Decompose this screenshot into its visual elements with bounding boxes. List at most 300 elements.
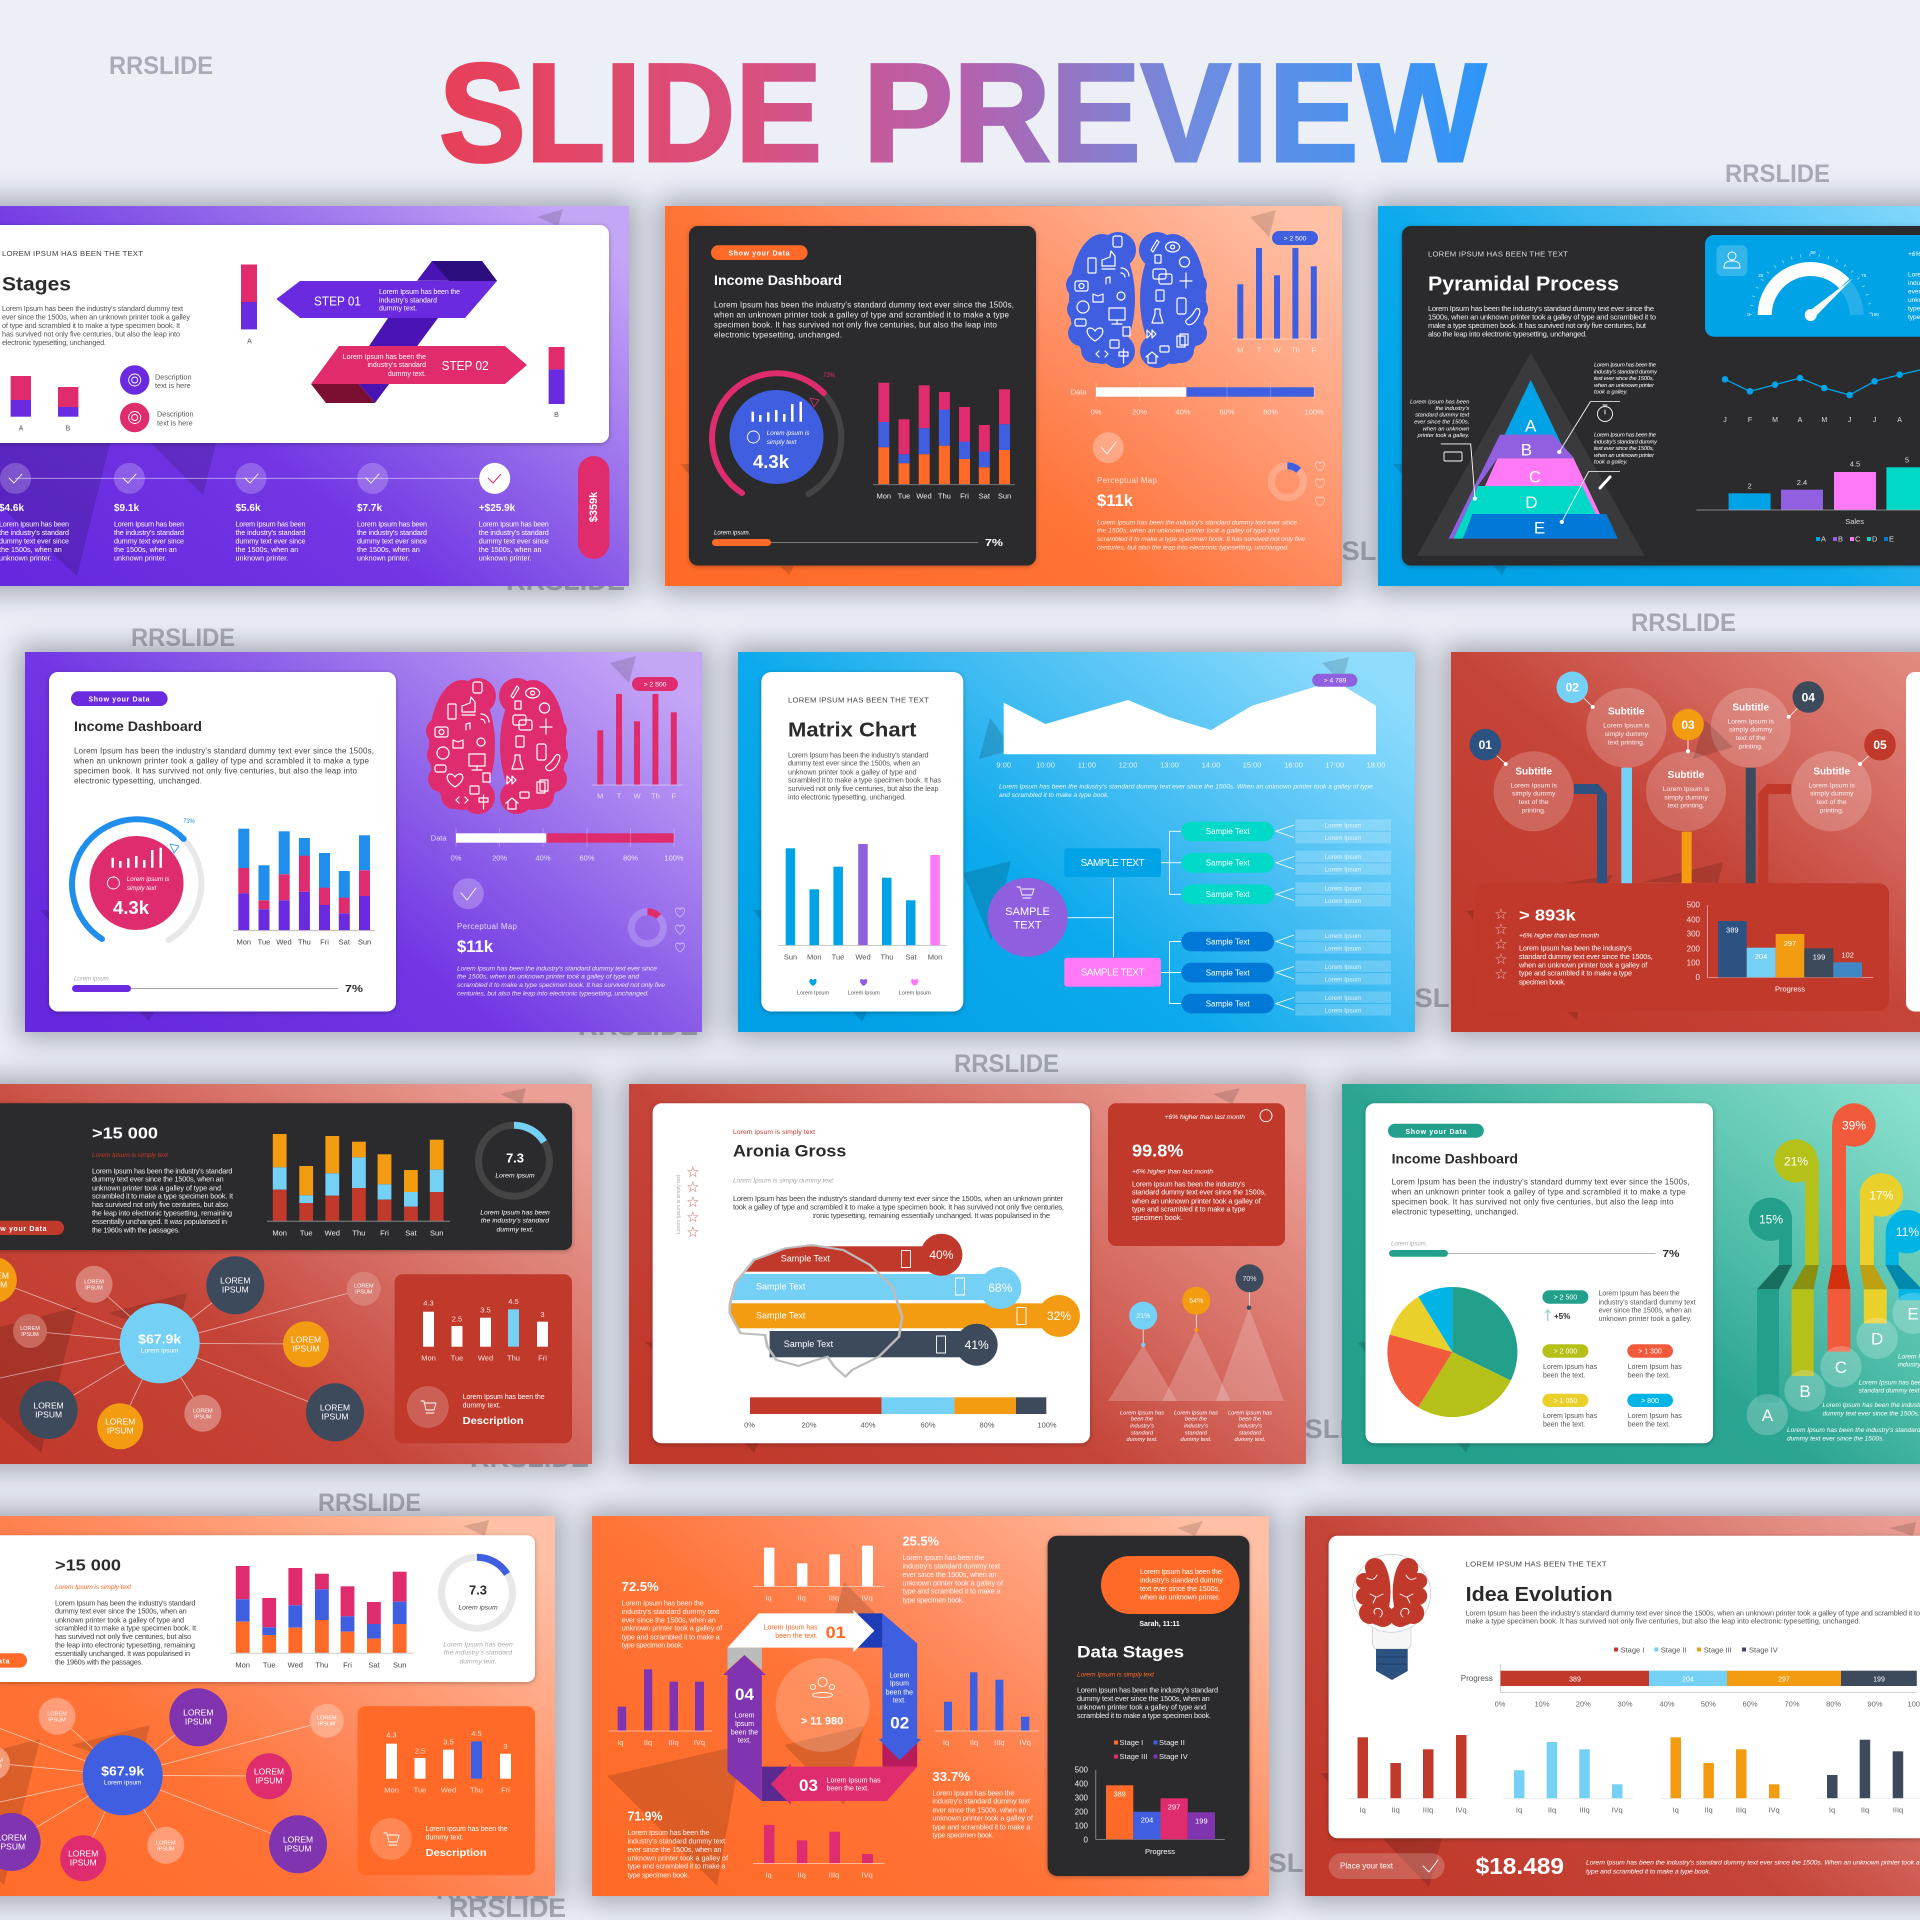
data progress bar: 0% (451, 854, 462, 863)
stat text: specimen book. (1519, 977, 1566, 986)
watermarks: RRSLIDE (1265, 1414, 1385, 1444)
circles with text: Lorem Ipsum is (1808, 782, 1856, 789)
callouts: when an unknown printer (1594, 383, 1655, 389)
panel: red stat: Lorem Ipsum has been the industry's (1132, 1179, 1245, 1188)
network diagram: LOREM (354, 1284, 374, 1290)
slide: 15 000 white (0, 1516, 555, 1896)
text blocks: percentages: 71.9% (628, 1810, 662, 1824)
stacked bar: progress: 199 (1873, 1676, 1885, 1684)
flowchart: Lorem Ipsum (1325, 976, 1361, 984)
circles with text: simply dummy (1664, 794, 1708, 801)
heading: Idea Evolution (1466, 1584, 1613, 1606)
stars: ☆ (1494, 920, 1508, 938)
stacked bar chart: Wed (276, 937, 292, 946)
text block: electronic typesetting, unchanged. (1392, 1208, 1519, 1217)
text block: perceptual map: centuries, but also the leap into electronic typesetting, unchanged. (1097, 544, 1289, 551)
bar chart: progress: 200 (1687, 944, 1701, 953)
circles with text: simply dummy (1810, 791, 1854, 798)
flowchart: SAMPLE (1005, 906, 1050, 918)
area chart: 9:00 (996, 761, 1011, 770)
donut (478, 1125, 550, 1233)
chart: percent ribbons: D (1871, 1330, 1883, 1348)
timeline values and text: the 1500s, when an (114, 545, 177, 554)
circles with text: text of the (1736, 735, 1766, 742)
chart: four quarter groups: IVq (1455, 1806, 1467, 1815)
chart: pyramid: C (1529, 468, 1541, 487)
flowchart: Sample Text (1206, 968, 1250, 978)
bar chart: sales: 5 (1905, 456, 1909, 465)
legend pills and text: unknown printer took a galley. (1599, 1316, 1692, 1323)
flowchart: Lorem Ipsum (1325, 995, 1361, 1002)
chart: peaks: 70% (1242, 1276, 1257, 1283)
text block (2, 304, 190, 347)
chart: percent ribbons: 17% (1869, 1188, 1894, 1202)
chart: small bars A B: B (66, 426, 71, 433)
chart: percent ribbons: 11% (1896, 1225, 1919, 1239)
captions: dummy text ever since the 1500s. (1787, 1435, 1884, 1442)
callouts: text ever since the 1500s, (1594, 446, 1654, 452)
ribbon: steps: STEP 02 (442, 359, 489, 373)
data progress bar (1071, 382, 1324, 417)
chart: top bars: IIq (797, 1593, 806, 1602)
panel: red stat: when an unknown printer took a galley of (1131, 1196, 1261, 1205)
speech bubble: industry's standard dummy (1140, 1575, 1223, 1584)
callout: total pill: $359k (588, 491, 600, 522)
slide: Income Dashboard purple (25, 652, 702, 1032)
timeline values and text: the industry's standard (0, 528, 69, 537)
heading (1077, 1643, 1184, 1678)
heading (55, 1557, 132, 1591)
title: PREVIEW (863, 34, 1486, 191)
panel: red stat: specimen book. (1132, 1213, 1182, 1222)
text block: unknown printer took a galley of type and (788, 767, 917, 776)
text blocks: percentages: type specimen book. (622, 1641, 683, 1650)
text block (92, 1166, 233, 1234)
ribbon: steps: Lorem Ipsum has been the (379, 289, 460, 296)
ribbons (1574, 768, 1791, 884)
stars: ☆ (686, 1193, 700, 1211)
stacked bar chart: Fri (380, 1228, 389, 1237)
panel: gauge: type (1908, 314, 1920, 321)
text block: Lorem Ipsum has been the industry's standard (92, 1166, 232, 1175)
stars: ☆ (1494, 965, 1508, 983)
slide: Aronia Gross (629, 1084, 1306, 1464)
chart: percent ribbons: 39% (1842, 1118, 1866, 1132)
numbered badges: 02 (1566, 681, 1579, 695)
gauge (712, 373, 841, 494)
stat text: Lorem Ipsum has been the industry's (1519, 944, 1632, 953)
text block: the 1960s with the passages. (92, 1225, 180, 1234)
stacked bar chart: Sat (339, 937, 351, 946)
data progress bar: 20% (492, 854, 507, 863)
donut: Lorem ipsum (495, 1172, 535, 1179)
network diagram: Lorem ipsum (141, 1347, 178, 1354)
text blocks: percentages: Lorem Ipsum has been the (932, 1788, 1014, 1797)
callouts: Lorem Ipsum has been the (1594, 433, 1657, 439)
watermarks: RRSLIDE (318, 1489, 421, 1517)
text block: dummy text ever since the 1500s, when an (92, 1175, 224, 1184)
network diagram: LOREM (84, 1279, 104, 1285)
chart: four quarter groups: IIIq (1736, 1806, 1746, 1815)
mini bar chart: W (1273, 346, 1281, 355)
network diagram: LOREM (105, 1417, 135, 1427)
circles with text: printing. (1820, 808, 1844, 815)
cycle diagram: text. (893, 1698, 906, 1705)
timeline values and text: unknown printer. (479, 553, 532, 562)
callout: total pill (578, 456, 609, 559)
legend: Stage I (1621, 1646, 1644, 1655)
text blocks: percentages: industry's standard dummy text (932, 1797, 1030, 1806)
area chart (996, 681, 1385, 770)
text block: essentially unchanged. It was popularised in (92, 1217, 227, 1226)
text block: perceptual map (457, 922, 665, 997)
area chart: 12:00 (1119, 761, 1137, 770)
text blocks: percentages: unknown printer took a galley of (622, 1624, 722, 1633)
chart: peaks: standard (1185, 1430, 1208, 1436)
timeline values and text: the 1500s, when an (0, 545, 62, 554)
timeline values and text: $7.7k (357, 503, 382, 514)
legend: Lorem Ipsum (899, 991, 931, 997)
stacked bar: progress: 389 (1569, 1676, 1581, 1684)
circles with text: Lorem Ipsum is (1510, 782, 1558, 789)
text blocks: percentages: type and scrambled it to make a (622, 1632, 720, 1641)
heading: Aronia Gross (733, 1142, 846, 1161)
stars: ☆ (686, 1208, 700, 1226)
timeline values and text: Lorem Ipsum has been (114, 520, 184, 528)
circles with text: Subtitle (1515, 766, 1552, 777)
chart: brain bars: 40% (929, 1248, 954, 1262)
stacked bar chart: Tue (263, 1660, 276, 1669)
gauge: 73% (823, 373, 836, 379)
circles with text: text printing. (1608, 739, 1645, 746)
panel: description: 3.5 (480, 1306, 491, 1315)
watermarks: RRSLIDE (1375, 983, 1495, 1013)
progress bar: 7% (345, 984, 363, 995)
data progress bar: 40% (1175, 408, 1191, 417)
stacked bar chart: Mon (272, 1228, 287, 1237)
bar chart: sales: Sales (1845, 517, 1864, 526)
legend pills and text: been the text. (1628, 1421, 1670, 1428)
icons (1444, 405, 1612, 488)
speech bubble: Lorem Ipsum has been the (1140, 1567, 1222, 1576)
flowchart: Lorem Ipsum (1325, 946, 1361, 952)
stacked bar: progress: 0% (1495, 1699, 1506, 1708)
callouts: Lorem Ipsum has been the (1594, 363, 1657, 369)
panel: description: 4.5 (508, 1297, 519, 1306)
gauge: simply text (767, 439, 797, 446)
stacked bar chart: Fri (960, 491, 969, 500)
panel: white card (0, 225, 609, 443)
text block: Lorem Ipsum has been the industry's standard (1077, 1686, 1218, 1695)
pill label: Show your Data (728, 250, 790, 258)
stacked bar: progress: 297 (1778, 1676, 1790, 1684)
legend pills and text: Lorem Ipsum has been the (1599, 1291, 1680, 1298)
stacked bar chart: Tue (300, 1228, 313, 1237)
mini bar chart: Th (651, 792, 660, 801)
icons and descriptions: Description (157, 410, 194, 419)
timeline values and text: dummy text ever since (236, 536, 306, 545)
text block (788, 750, 941, 802)
gauge: 73% (183, 819, 196, 825)
text blocks: percentages: type specimen book. (902, 1595, 964, 1604)
chart: left bars (609, 1669, 712, 1747)
data progress bar: 40% (535, 854, 551, 863)
callouts: ever since the 1500s, (1414, 419, 1469, 425)
text block: dummy text ever since the 1500s, when an (1077, 1694, 1210, 1703)
area chart: 14:00 (1202, 761, 1220, 770)
panel: description: 2.5 (452, 1314, 462, 1323)
circles with text: Subtitle (1668, 770, 1705, 781)
network diagram: IPSUM (256, 1776, 282, 1786)
text block: the leap into electronic typesetting, remaining (92, 1209, 232, 1218)
text block: 1500s, when an unknown printer took a galley of type and scrambled it to (1428, 312, 1656, 321)
bar chart: progress: 102 (1841, 951, 1854, 960)
network diagram: IPSUM (293, 1344, 319, 1354)
stacked bar: progress: 40% (1659, 1699, 1675, 1708)
text blocks: percentages: type and scrambled it to make a (902, 1587, 1000, 1596)
heading: Matrix Chart (788, 720, 917, 742)
data progress bar: Data (431, 833, 447, 842)
area chart: 16:00 (1284, 761, 1303, 770)
text block: Lorem Ipsum has been the industry's standard (788, 750, 928, 759)
panel: description: 4.3 (423, 1299, 434, 1308)
text block: perceptual map: Perceptual Map (1097, 476, 1158, 485)
circles with text (1494, 688, 1872, 831)
flowchart: Lorem Ipsum (1325, 933, 1361, 940)
stacked progress bar: 20% (801, 1421, 817, 1430)
heading: >15 000 (92, 1125, 158, 1142)
bar chart: progress: 297 (1784, 939, 1796, 948)
stacked progress bar: 60% (920, 1421, 936, 1430)
bar chart: sales: 2 (1748, 482, 1752, 491)
progress bar (72, 977, 363, 995)
chart: percent ribbons: A (1762, 1406, 1774, 1425)
cycle diagram: > 11 980 (801, 1715, 843, 1727)
circles with text: text of the (1817, 799, 1847, 806)
flowchart: Lorem Ipsum (1325, 822, 1361, 830)
panel: description: Fri (538, 1354, 547, 1363)
mini bar chart: F (1312, 346, 1317, 355)
italic caption (999, 783, 1373, 799)
stacked bar chart: Sun (998, 491, 1011, 500)
panel: gauge: type (1908, 305, 1920, 312)
panel: gauge: 100 (1871, 312, 1879, 317)
stacked bar: progress: 204 (1682, 1676, 1694, 1684)
bar A (241, 264, 257, 346)
stacked bar: progress (1461, 1664, 1920, 1708)
panel: dark card (689, 226, 1036, 566)
legend: Lorem Ipsum (797, 991, 829, 997)
pill label (711, 245, 808, 260)
line chart: J (1848, 417, 1851, 424)
cycle diagram: 03 (799, 1776, 818, 1795)
captions (1787, 1353, 1920, 1442)
progress bar (712, 531, 1003, 549)
cycle diagram: Lorem (735, 1712, 755, 1719)
donut and hearts (1271, 462, 1324, 506)
chart: pyramid (1417, 353, 1645, 556)
callout pill: > 2 500 (1284, 236, 1307, 242)
legend pills and text: Lorem Ipsum has (1628, 1364, 1682, 1371)
gauge: 4.3k (753, 452, 790, 472)
panel: dark card (1048, 1536, 1249, 1876)
stacked bar chart: Sat (405, 1228, 417, 1237)
heading: >15 000 (55, 1557, 121, 1574)
timeline values and text: the industry's standard (479, 528, 549, 537)
legend pills and text: ever since the 1500s, when an (1599, 1308, 1692, 1315)
circles with text: Subtitle (1813, 766, 1850, 777)
legend pills and text: been the text. (1543, 1372, 1585, 1379)
heading (1466, 1559, 1613, 1606)
ribbon: steps (276, 261, 527, 403)
stacked bar chart: Thu (938, 491, 951, 500)
callout pill (1312, 674, 1357, 687)
legend pills and text: Lorem Ipsum has (1543, 1413, 1598, 1420)
slide: Data Stages (592, 1516, 1269, 1896)
mini bar chart: W (633, 792, 641, 801)
heading (1428, 249, 1619, 295)
text block: perceptual map: $11k (1097, 491, 1134, 510)
panel: description: Thu (507, 1354, 520, 1363)
legend pills and text: been the text. (1628, 1372, 1670, 1379)
bar chart: progress: 400 (1075, 1780, 1089, 1789)
panel: description: 3 (540, 1310, 545, 1319)
bar chart: sales: E (1889, 534, 1894, 544)
text block: scrambled it to make a type specimen book. It (55, 1624, 196, 1633)
chart: bottom bars: IIq (797, 1871, 806, 1880)
text block: into electronic typesetting, unchanged. (788, 793, 906, 802)
legend pills and text: > 800 (1641, 1398, 1659, 1405)
ribbon: steps: STEP 01 (314, 294, 361, 308)
panel: next slide card (1906, 672, 1920, 1012)
bar chart: progress (1687, 901, 1873, 993)
bar chart: progress (1075, 1765, 1225, 1856)
legend (1614, 1646, 1778, 1655)
text block: has survived not only five centuries, but also (92, 1200, 228, 1209)
text block: perceptual map: centuries, but also the leap into electronic typesetting, unchanged. (457, 990, 649, 997)
network diagram: LOREM (317, 1716, 337, 1722)
chart: four quarter groups: IIIq (1423, 1806, 1433, 1815)
heading: Stages: LOREM IPSUM HAS BEEN THE TEXT (2, 249, 143, 258)
chart: peaks: been the (1185, 1417, 1207, 1423)
circles with text: Lorem Ipsum is (1727, 718, 1775, 725)
progress bar: Lorem ipsum. (714, 531, 750, 537)
text block: specimen book. It has survived not only five centuries, but also the leap into (1392, 1198, 1674, 1207)
heading: LOREM IPSUM HAS BEEN THE TEXT (1428, 249, 1568, 258)
heading: Income Dashboard (1392, 1150, 1518, 1166)
panel: gauge: 75 (1861, 273, 1867, 278)
chart: percent ribbons: E (1907, 1304, 1919, 1324)
data progress bar: 80% (623, 854, 638, 863)
panel: description: 2.5 (415, 1746, 425, 1755)
pill label (0, 1653, 27, 1668)
numbered badges (1470, 672, 1896, 766)
area chart: 13:00 (1160, 761, 1179, 770)
ribbon: steps: Lorem Ipsum has been the (343, 354, 426, 361)
panel: description: dummy text. (463, 1402, 501, 1409)
timeline values and text: unknown printer. (236, 553, 288, 562)
panel: gauge: 50 (1810, 250, 1816, 255)
timeline values and text: unknown printer. (357, 553, 410, 562)
panel: gauge: 25 (1758, 273, 1764, 278)
bar chart: progress: Progress (1775, 984, 1805, 993)
text block (73, 746, 374, 785)
network diagram: IPSUM (318, 1722, 336, 1728)
network diagram: IPSUM (185, 1717, 212, 1727)
timeline values and text: $5.6k (236, 503, 261, 514)
circles with text: printing. (1522, 808, 1546, 815)
text block: the leap into electronic typesetting, remaining (55, 1641, 195, 1650)
legend: Stage III (1120, 1752, 1147, 1761)
stacked bar: progress: 10% (1534, 1699, 1550, 1708)
text block: dummy text ever since the 1500s, when an (55, 1607, 187, 1616)
legend pills and text: industry's standard dummy text (1599, 1299, 1696, 1306)
panel: description: Tue (414, 1786, 426, 1795)
data progress bar: 60% (1219, 408, 1235, 417)
text blocks: percentages: type and scrambled it to make a (932, 1822, 1030, 1831)
callouts: the industry's (1435, 406, 1469, 412)
chart: peaks: Lorem Ipsum has (1120, 1410, 1164, 1416)
heading: Data Stages (1077, 1643, 1184, 1662)
bar chart: sales (1696, 456, 1920, 544)
circles with text: simply dummy (1729, 727, 1773, 734)
panel: description: dummy text. (426, 1834, 464, 1841)
text block: Lorem Ipsum has been the industry's standard dummy text ever since the 1500s, when an unknown printer took a galley of type and scrambled it to (1466, 1608, 1920, 1617)
text blocks: percentages: 33.7% (932, 1770, 970, 1784)
cycle diagram: 02 (890, 1713, 909, 1732)
title: SLIDE (439, 34, 822, 191)
heading: Lorem Ipsum is simply text (1077, 1671, 1155, 1678)
mini bar chart: T (1257, 346, 1262, 355)
network diagram (0, 1256, 381, 1449)
text block: has survived not only five centuries, but also the leap into (2, 329, 180, 338)
panel: dark card (0, 1103, 572, 1250)
chart: brain bars: Sample Text (756, 1282, 806, 1292)
donut and hearts (631, 908, 684, 952)
stacked progress bar: 0% (744, 1421, 755, 1430)
bar chart: sales: A (1821, 534, 1826, 544)
chart: four quarter groups: Iq (1360, 1806, 1366, 1815)
panel: description: 3.5 (443, 1738, 454, 1747)
text blocks: percentages: ever since the 1500s, when an (902, 1570, 996, 1579)
network diagram: IPSUM (21, 1332, 39, 1338)
stacked bar chart: Wed (916, 491, 932, 500)
network diagram: $67.9k (101, 1763, 145, 1778)
stacked bar chart: Mon (235, 1660, 250, 1669)
network diagram (0, 1688, 344, 1881)
text block: electronic typesetting, unchanged. (2, 338, 106, 347)
slide: Stages (0, 206, 629, 586)
network diagram: LOREM (283, 1835, 313, 1845)
text block: Lorem Ipsum has been the industry's standard dummy text ever since the 1500s, (1392, 1178, 1690, 1187)
text block: perceptual map: Lorem Ipsum has been the industry's standard dummy text ever since (457, 965, 657, 972)
captions: Lorem Ipsum has been the industry's standard (1787, 1427, 1920, 1434)
line chart: J (1723, 417, 1727, 424)
chart: peaks: industry's (1130, 1423, 1154, 1429)
text block: make a type specimen book. It has survived not only five centuries, but (1428, 321, 1647, 330)
bar chart: progress: 204 (1141, 1816, 1153, 1825)
flowchart: SAMPLE TEXT (1081, 858, 1145, 869)
chart: peaks: standard (1131, 1430, 1154, 1436)
panel: red stat: +6% higher than last month (1132, 1169, 1213, 1176)
progress bar (1389, 1241, 1680, 1260)
data progress bar (431, 828, 684, 863)
legend: Stage II (1159, 1738, 1185, 1747)
text block (1077, 1686, 1218, 1720)
chart: peaks: 21% (1136, 1313, 1150, 1320)
timeline values and text: dummy text ever since (114, 536, 184, 545)
flowchart: Sample Text (1206, 827, 1250, 836)
